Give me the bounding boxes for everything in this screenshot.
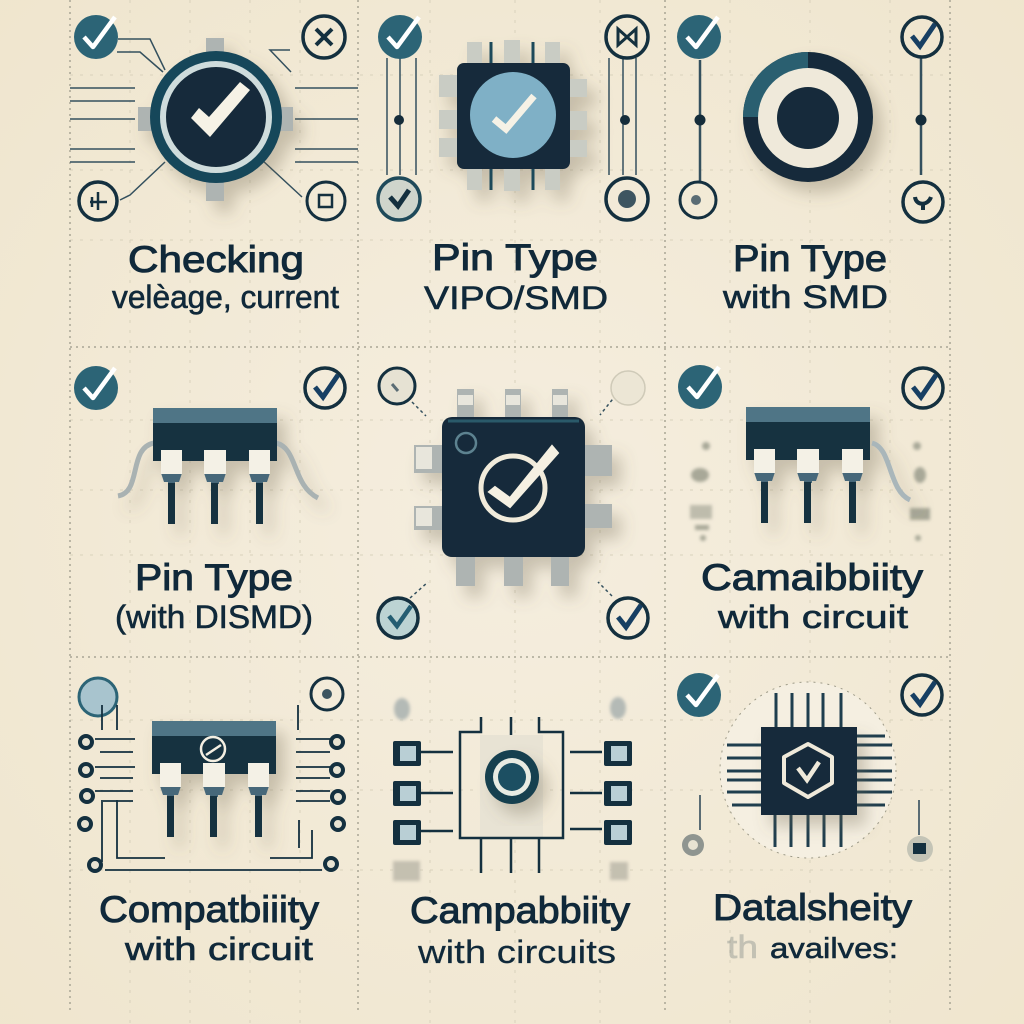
panel: checking voltage, current [70, 15, 358, 315]
connections and pads [393, 741, 632, 845]
icon: status circles and connectors [70, 15, 358, 220]
halo [720, 682, 896, 858]
subheading [727, 929, 898, 965]
icon: DIP chip [152, 721, 276, 837]
subheading: VIPO/SMD [424, 280, 608, 316]
faded marks [393, 697, 628, 881]
heading: Pin Type [135, 557, 293, 598]
icon: centre component [460, 717, 563, 873]
subheading: (with DISMD) [115, 599, 313, 635]
heading: Checking [128, 239, 304, 280]
icons: status and connectors [378, 368, 648, 638]
heading: Datalsheity [713, 887, 913, 928]
icon: chip with check [439, 40, 587, 191]
panel: pin type with SMD [677, 15, 943, 315]
heading: Pin Type [733, 238, 887, 279]
icon: main check badge [138, 38, 293, 201]
panel: central chip [378, 368, 648, 638]
subheading: th [727, 929, 758, 965]
icon: DIP chip [746, 407, 910, 523]
panel: datasheet availability [677, 673, 942, 965]
icon: chip with shield [761, 727, 857, 815]
panel: compatibility with circuit [79, 678, 344, 967]
subheading: velèage, current [112, 279, 339, 315]
panel: capability with circuit [678, 365, 943, 635]
icons: status [74, 366, 345, 410]
icon: DIP chip [118, 408, 318, 524]
icon: status circles and traces [378, 15, 648, 220]
panel: pin type with DISMD [74, 366, 345, 635]
icons: status [677, 673, 942, 862]
heading: Campabbiity [410, 890, 631, 931]
icon: large chip [414, 389, 612, 586]
subheading: with circuits [417, 934, 616, 970]
heading: Camaibbiity [701, 557, 924, 598]
icons: status [678, 365, 943, 409]
panel: capability with circuits [393, 697, 632, 970]
icon: status circles and traces [677, 15, 943, 222]
subheading: availves: [770, 933, 898, 965]
heading: Compatbiiity [99, 889, 320, 930]
traces [727, 693, 892, 847]
icons: status [79, 678, 343, 716]
heading: Pin Type [432, 237, 598, 278]
subheading: with circuit [124, 931, 313, 967]
subheading: with SMD [722, 279, 888, 315]
icon: ring target [743, 52, 873, 182]
circuit [79, 705, 344, 871]
panel: pin type VIPO/SMD [378, 15, 648, 316]
faded marks [690, 442, 930, 541]
subheading: with circuit [717, 599, 908, 635]
